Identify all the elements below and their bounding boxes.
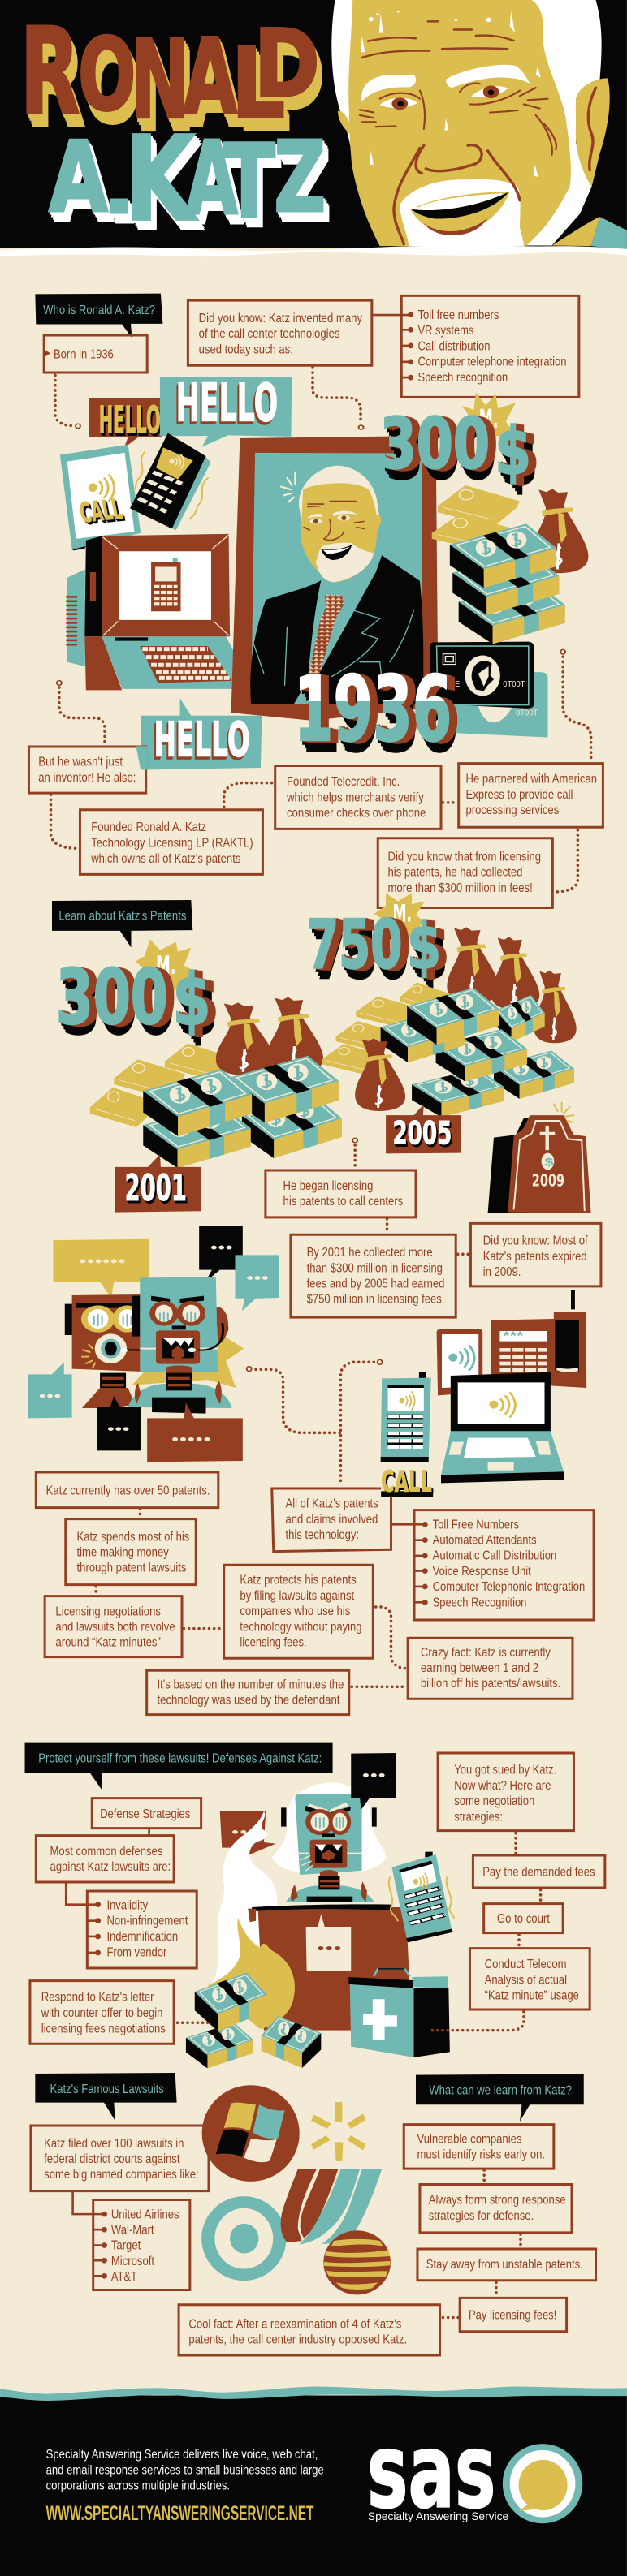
speech bubble: teal xyxy=(235,1255,279,1311)
text box: all patents: and claims involved xyxy=(286,1512,378,1527)
dotted connector xyxy=(519,2234,522,2248)
list box: companies: Microsoft xyxy=(111,2255,155,2268)
text box: number of minutes: technology was used by the defendant xyxy=(157,1693,340,1708)
dotted connector xyxy=(539,1890,542,1903)
dotted connector xyxy=(443,2316,459,2319)
burning money stacks xyxy=(186,1973,321,2068)
text box: fees collected xyxy=(378,838,552,908)
dotted connector xyxy=(431,2012,524,2031)
figure: 300 dollars: 300 xyxy=(380,404,490,485)
text box: defense strategies xyxy=(92,1798,201,1829)
heading: Who is Ronald A. Katz?: Who is Ronald A. Katz? xyxy=(43,303,155,317)
dotted connector: to inventor box xyxy=(57,681,105,744)
figure: 300 dollars 2001 xyxy=(56,954,210,1041)
figure: 300 dollars 2001: 300 xyxy=(56,954,168,1041)
icon: signal lines xyxy=(391,1333,430,1370)
text: HELLO xyxy=(99,398,161,442)
dotted connector xyxy=(517,1935,521,1947)
header black band xyxy=(0,0,627,248)
icon: tablet call: CALL xyxy=(77,493,125,529)
text box: common defenses: against Katz lawsuits are: xyxy=(50,1860,171,1874)
text box: fees collected: his patents, he had collected xyxy=(388,864,522,880)
footer description: and email response services to small businesses and large xyxy=(46,2463,324,2478)
dotted connector xyxy=(178,2021,212,2024)
icon: tombstone 2009: 2009 xyxy=(532,1171,564,1191)
dotted connector xyxy=(482,2170,486,2183)
text: HELLO xyxy=(176,373,278,433)
dollar 750 million starburst xyxy=(374,893,425,941)
text box: founded Telecredit: consumer checks over phone xyxy=(287,806,426,821)
heading: Who is Ronald A. Katz? xyxy=(35,294,162,338)
label: 2001: 2001 xyxy=(125,1168,187,1210)
text box: respond to letter: licensing fees negotiations xyxy=(41,2022,166,2035)
text box: go to court xyxy=(484,1904,563,1933)
text box: pay licensing fees: Pay licensing fees! xyxy=(469,2308,556,2323)
list box: defenses: Invalidity xyxy=(106,1898,149,1912)
dotted connector: inventor to RAKTL xyxy=(51,795,78,848)
text box: founded Telecredit: which helps merchants verify xyxy=(286,790,424,805)
text box: cool fact: patents, the call center industry opposed Katz. xyxy=(188,2333,407,2347)
dollar 300 million starburst xyxy=(462,393,516,445)
dotted connector xyxy=(376,1607,406,1669)
icon: tombstone 2009: $ xyxy=(545,1156,554,1169)
icon: gold bars xyxy=(432,485,520,552)
icon: gold bars 2005 xyxy=(322,983,450,1075)
dollar 300 million starburst: M. xyxy=(479,404,498,434)
text box: but he wasn't just xyxy=(28,746,147,793)
text box: go to court: Go to court xyxy=(497,1911,550,1926)
title: Ronald: R xyxy=(20,3,80,141)
title: Ronald: D xyxy=(254,10,320,118)
text box: began licensing: his patents to call centers xyxy=(283,1194,403,1208)
portrait of Katz xyxy=(331,0,627,250)
figure: 300 dollars: $ xyxy=(495,413,531,489)
logo: Walmart spark xyxy=(311,2102,365,2161)
text box: number of minutes: It's based on the number of minutes the xyxy=(157,1678,344,1691)
icon: tombstone 2009 xyxy=(488,1103,591,1213)
heading: protect yourself: Protect yourself from these lawsuits! Defenses Against Katz: xyxy=(38,1751,322,1766)
dollar 300 million starburst xyxy=(135,939,196,993)
judge robot xyxy=(272,1782,386,1902)
title: A. Katz: A xyxy=(49,120,108,235)
list box: companies xyxy=(73,2192,190,2290)
text box: founded RAKTL: Technology Licensing LP (RAKTL) xyxy=(91,835,253,851)
title: Ronald xyxy=(20,3,320,144)
speech bubble: large hello xyxy=(160,373,292,447)
title: Ronald: N xyxy=(130,17,190,144)
text box: founded RAKTL: Founded Ronald A. Katz xyxy=(91,820,206,834)
icon: money bags 2001 xyxy=(216,997,323,1075)
title: Ronald: O xyxy=(78,18,136,134)
text box: founded Telecredit: Founded Telecredit, Inc. xyxy=(287,774,400,789)
text box: by 2001: $750 million in licensing fees. xyxy=(307,1292,444,1307)
text box: by 2001: than $300 million in licensing xyxy=(307,1261,443,1275)
connector line xyxy=(148,1829,150,1836)
text box: began licensing: He began licensing xyxy=(283,1178,373,1193)
list box: patented technology: Toll Free Numbers xyxy=(433,1518,519,1531)
text box: pay fees xyxy=(473,1855,605,1888)
speech bubble: bottom hello xyxy=(141,698,262,770)
text box: by 2001: By 2001 he collected more xyxy=(307,1245,433,1260)
logo: AT&T globe xyxy=(323,2230,391,2294)
text box: did you know inventions: used today such as: xyxy=(199,342,293,356)
text box: crazy fact: earning between 1 and 2 xyxy=(421,1661,538,1675)
text box: born in 1936: Born in 1936 xyxy=(54,347,114,361)
speech bubble: yellow xyxy=(53,1239,149,1298)
text box: lawsuits filed: Katz filed over 100 lawsuits in xyxy=(44,2136,184,2151)
text box: by 2001 xyxy=(291,1234,456,1317)
title: A. Katz xyxy=(49,112,326,248)
text box: founded RAKTL xyxy=(80,810,262,874)
label: 2001 xyxy=(115,1154,201,1213)
speech bubble: black xyxy=(199,1226,243,1282)
title: A. Katz: T xyxy=(223,123,275,241)
logo: Target xyxy=(201,2196,286,2281)
list box: companies: Wal-Mart xyxy=(111,2223,154,2238)
text box: number of minutes xyxy=(147,1670,349,1715)
text box: vulnerable companies: Vulnerable companies xyxy=(417,2132,521,2146)
icon: money bags 2005 xyxy=(447,927,577,1043)
dotted connector: 2005 to licensing xyxy=(352,1138,357,1168)
dotted connector: collected to expired xyxy=(458,1252,469,1256)
credit cards: 0T00T xyxy=(516,709,538,717)
dotted connector xyxy=(184,1627,222,1630)
text box: all patents: this technology: xyxy=(286,1527,359,1542)
label: 2005: 2005 xyxy=(392,1114,452,1152)
icon: teal mobile xyxy=(381,1372,431,1462)
heading: learn about Katz's patents: Learn about Katz's Patents xyxy=(58,909,187,924)
speech bubble: rust bottom xyxy=(147,1402,243,1462)
text box: protects his patents: by filing lawsuits against xyxy=(240,1588,354,1603)
heading: protect yourself xyxy=(25,1743,333,1790)
text box: by 2001: fees and by 2005 had earned xyxy=(307,1276,444,1290)
yellow burst behind robots xyxy=(132,1331,244,1388)
logo: SAS: Specialty Answering Service xyxy=(368,2510,508,2523)
text box: defense strategies: Defense Strategies xyxy=(100,1807,190,1821)
heading: learn about Katz's patents xyxy=(52,900,192,947)
footer description: corporations across multiple industries. xyxy=(46,2479,230,2493)
text box: did you know inventions xyxy=(188,300,372,365)
text box: did you know inventions: of the call center technologies xyxy=(199,326,340,341)
text: WWW.SPECIALTYANSWERINGSERVICE.NET xyxy=(46,2502,314,2525)
heading: famous lawsuits xyxy=(35,2073,177,2121)
text box: sued by Katz: some negotiation xyxy=(454,1794,534,1808)
dotted connector: born to hello xyxy=(55,375,80,429)
text box: protects his patents xyxy=(224,1565,373,1658)
list box: companies: AT&T xyxy=(111,2270,137,2284)
title: A. Katz: . xyxy=(102,149,136,229)
dollar 300 million starburst: M. xyxy=(156,952,176,980)
text box: crazy fact xyxy=(408,1638,573,1699)
dotted connector: did you know to 300 xyxy=(313,368,364,429)
dotted connector: RAKTL to Telecredit xyxy=(224,783,272,807)
icon: money stacks 2005 xyxy=(381,988,574,1117)
dotted connector: card to American Express xyxy=(560,649,591,760)
icon: money stacks 2001 xyxy=(143,1056,342,1168)
figure: 300 dollars 2001: $ xyxy=(173,958,210,1041)
text box: making money xyxy=(66,1519,196,1585)
text box: Katz minutes xyxy=(45,1596,182,1657)
text box: lawsuits filed: some big named companies like: xyxy=(44,2168,199,2182)
list box: call center technologies: Call distribution xyxy=(417,339,491,353)
speech bubble: rust judge xyxy=(220,1811,276,1855)
icon: desk phone xyxy=(491,1290,586,1388)
list box: call center technologies: Toll free numbers xyxy=(417,308,499,322)
dotted connector xyxy=(514,1833,517,1854)
text box: respond to letter: with counter offer to begin xyxy=(41,2005,162,2020)
list box: patented technology: Voice Response Unit xyxy=(433,1564,531,1579)
burning money fire xyxy=(208,1918,295,2029)
dotted connector: robots to technology xyxy=(247,1367,339,1432)
text: HELLO xyxy=(154,712,250,768)
text box: protects his patents: technology without paying xyxy=(240,1620,362,1634)
text box: common defenses xyxy=(36,1836,174,1882)
text box: response strategies xyxy=(420,2185,572,2233)
text: CALL xyxy=(381,1464,432,1498)
icon: mobile phone xyxy=(130,433,210,530)
robot: rust xyxy=(65,1294,143,1408)
text box: sued by Katz: Now what? Here are xyxy=(454,1779,551,1793)
text box: respond to letter: Respond to Katz's letter xyxy=(41,1990,154,2005)
list box: defenses: Non-infringement xyxy=(106,1914,188,1928)
text box: sued by Katz: strategies: xyxy=(454,1810,503,1824)
icon: money stacks xyxy=(450,523,565,644)
text box: over 50 patents xyxy=(36,1472,218,1508)
dotted connector xyxy=(352,1685,407,1688)
footer teal wave xyxy=(0,2386,627,2401)
list box: patented technology: Automated Attendants xyxy=(433,1533,537,1548)
credit cards: LSLE xyxy=(442,679,460,689)
footer description xyxy=(46,2448,324,2493)
icon: first aid briefcase xyxy=(348,1969,450,2057)
title: Ronald: A xyxy=(183,16,237,137)
speech bubble: small hello xyxy=(89,398,162,448)
icon: phone xyxy=(389,1824,472,1942)
text box: over 50 patents: Katz currently has over 50 patents. xyxy=(46,1484,210,1498)
text box: vulnerable companies: must identify risks early on. xyxy=(417,2147,545,2162)
dotted connector: licensing to collected xyxy=(386,1219,388,1234)
logo: SAS: sas xyxy=(367,2412,495,2531)
title: A. Katz: Z xyxy=(274,120,326,235)
text box: protects his patents: licensing fees. xyxy=(240,1635,307,1650)
footer description: Specialty Answering Service delivers live voice, web chat, xyxy=(46,2448,318,2462)
text box: all patents: All of Katz's patents xyxy=(286,1497,378,1511)
text box: lawsuits filed: federal district courts against xyxy=(44,2152,180,2166)
text box: Katz minutes: around “Katz minutes” xyxy=(55,1635,161,1650)
dollar 750 million starburst: M. xyxy=(392,899,412,928)
text box: pay licensing fees xyxy=(460,2298,567,2332)
label: 2005 xyxy=(386,1104,461,1153)
credit cards xyxy=(430,642,547,738)
portrait frame xyxy=(231,436,438,721)
text box: American Express: processing services xyxy=(466,803,559,817)
dotted connector: Telecredit to American Express xyxy=(443,801,458,804)
text box: cool fact xyxy=(179,2305,440,2355)
dotted connector xyxy=(94,1587,97,1596)
text box: all patents xyxy=(272,1488,391,1552)
text box: patents expired: in 2009. xyxy=(483,1264,521,1279)
text box: began licensing xyxy=(266,1170,416,1217)
text box: cool fact: Cool fact: After a reexamination of 4 of Katz's xyxy=(188,2317,401,2332)
text box: did you know inventions: Did you know: Katz invented many xyxy=(199,311,362,325)
logo: United Airlines xyxy=(281,2169,382,2244)
text box: patents expired xyxy=(470,1223,601,1286)
text box: founded RAKTL: which owns all of Katz's patents xyxy=(91,851,240,866)
text box: born in 1936 xyxy=(43,335,147,373)
portrait: Katz in suit xyxy=(250,453,423,704)
list box: defenses: From vendor xyxy=(106,1945,166,1959)
title: Ronald: L xyxy=(231,28,285,140)
icon: money bag front xyxy=(355,1038,405,1111)
text box: but he wasn't just: an inventor! He also: xyxy=(38,770,136,785)
list box: defenses: Indemnification xyxy=(106,1929,178,1944)
text box: founded Telecredit xyxy=(275,766,441,829)
speech bubble: black bottom xyxy=(97,1396,141,1450)
figure: 750 dollars 2005 xyxy=(307,906,441,984)
heading: famous lawsuits: Katz's Famous Lawsuits xyxy=(50,2082,164,2096)
text box: making money: Katz spends most of his xyxy=(77,1530,189,1544)
speech bubble: black judge xyxy=(351,1753,396,1810)
icon: desktop computer xyxy=(66,534,254,690)
header wave edge xyxy=(0,246,627,256)
icon: gold bars 2001 xyxy=(90,1044,232,1127)
list box: call center technologies: Speech recognition xyxy=(417,370,508,385)
text box: Katz minutes: Licensing negotiations xyxy=(55,1605,161,1618)
speech bubble: teal left xyxy=(28,1362,72,1418)
text box: protects his patents: Katz protects his patents xyxy=(240,1573,357,1587)
list box: call center technologies xyxy=(372,295,579,397)
judge bench xyxy=(248,1904,412,2031)
list box: patented technology: Speech Recognition xyxy=(433,1596,526,1609)
footer black band xyxy=(0,2395,627,2576)
figure: 750 dollars 2005: $ xyxy=(407,909,441,983)
icon: tablet call xyxy=(60,445,141,550)
list box: patented technology xyxy=(391,1510,594,1620)
dotted connector: American Express to fees box xyxy=(554,830,577,892)
text box: response strategies: strategies for defense. xyxy=(429,2209,534,2223)
text box: but he wasn't just: But he wasn't just xyxy=(38,754,123,769)
list box: defenses xyxy=(66,1883,197,1968)
text box: lawsuits filed xyxy=(31,2126,209,2191)
dotted connector xyxy=(495,2282,498,2297)
list box: companies: Target xyxy=(111,2238,141,2253)
icon: money bag xyxy=(531,489,588,573)
text box: unstable patents xyxy=(417,2249,596,2281)
credit cards: 0T00T xyxy=(503,679,525,689)
text box: Katz minutes: and lawsuits both revolve xyxy=(55,1620,175,1634)
title: A. Katz: K xyxy=(125,112,197,248)
text box: making money: time making money xyxy=(77,1545,169,1560)
text box: making money: through patent lawsuits xyxy=(77,1561,186,1575)
heading: what can we learn xyxy=(416,2074,584,2122)
title: A. Katz: A xyxy=(186,119,238,238)
text box: sued by Katz xyxy=(438,1753,573,1831)
logo: Microsoft xyxy=(202,2085,300,2182)
text box: telecom analysis xyxy=(469,1949,590,2010)
icon: desk phone: *** xyxy=(503,1329,525,1342)
dotted connector: phones to technology xyxy=(340,1359,383,1485)
text box: American Express xyxy=(459,764,603,827)
icon: rust tablet xyxy=(437,1329,482,1395)
figure: 750 dollars 2005: 750 xyxy=(307,906,402,984)
smoke xyxy=(212,1811,282,1983)
list box: call center technologies: VR systems xyxy=(417,323,473,338)
text box: respond to letter xyxy=(30,1981,174,2044)
text box: common defenses: Most common defenses xyxy=(50,1845,162,1859)
text box: vulnerable companies xyxy=(404,2125,554,2169)
robot: teal xyxy=(120,1277,232,1414)
list box: companies: United Airlines xyxy=(111,2208,179,2221)
dotted connector xyxy=(139,1509,141,1518)
icon: call label xyxy=(381,1464,433,1498)
icon: laptop xyxy=(441,1372,564,1483)
text box: protects his patents: companies who use his xyxy=(240,1604,350,1618)
text box: fees collected: more than $300 million in fees! xyxy=(388,881,533,895)
